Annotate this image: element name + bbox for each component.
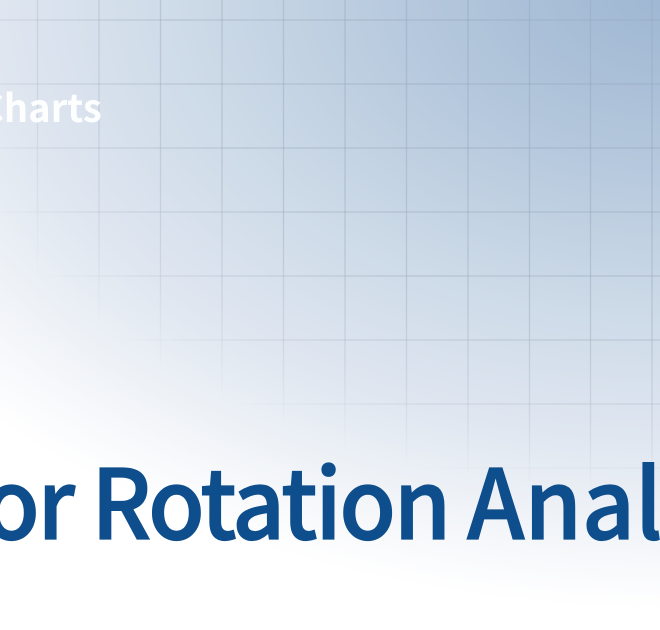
grid pattern xyxy=(0,0,660,469)
